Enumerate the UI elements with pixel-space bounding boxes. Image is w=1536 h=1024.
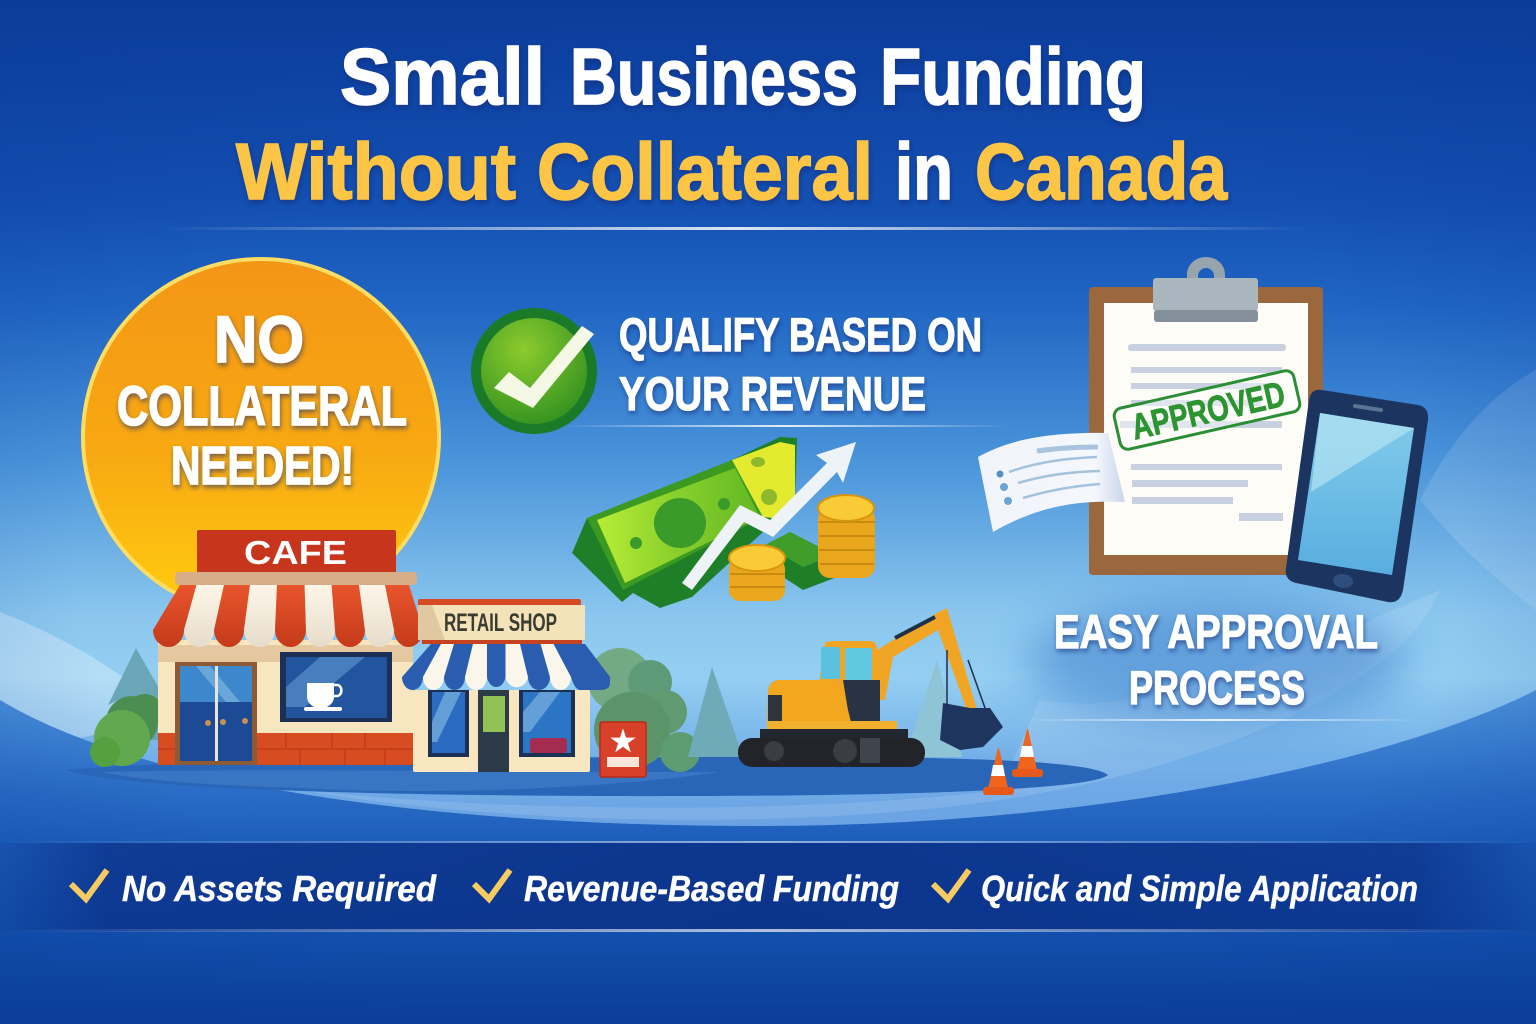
check badge	[471, 308, 597, 434]
badge: no collateral needed: NO	[214, 302, 304, 376]
title line 1: Small	[340, 32, 545, 121]
cafe building	[153, 530, 423, 765]
qualify text: QUALIFY BASED ON	[619, 308, 982, 361]
badge: no collateral needed	[83, 259, 439, 615]
retail sign: RETAIL SHOP	[444, 609, 557, 637]
phone	[1286, 390, 1428, 602]
retail windows and door	[428, 690, 575, 772]
easy approval text	[1054, 605, 1378, 714]
retail awning	[402, 644, 610, 690]
cafe sign	[197, 530, 396, 573]
bottom band	[0, 841, 1536, 932]
ground shadow	[65, 757, 1108, 796]
title line 1: Business	[570, 32, 858, 121]
easy approval text: EASY APPROVAL	[1054, 605, 1378, 658]
money and coins chart	[572, 437, 875, 608]
retail shop	[402, 599, 610, 772]
badge: no collateral needed: NEEDED!	[171, 436, 354, 496]
clipboard	[1089, 257, 1323, 575]
easy approval text: PROCESS	[1129, 661, 1305, 714]
clip	[1153, 257, 1258, 322]
paper note	[978, 433, 1125, 532]
benefit 3: Quick and Simple Application	[981, 868, 1418, 909]
awning beam	[175, 572, 417, 585]
excavator	[738, 608, 1003, 767]
tracks	[760, 729, 908, 738]
document lines	[1120, 344, 1286, 521]
boom and arm	[877, 608, 977, 713]
retail sign	[418, 599, 585, 644]
qualify text	[619, 308, 982, 420]
cafe awning	[153, 585, 423, 647]
small note stack	[765, 532, 837, 590]
cafe door	[175, 662, 257, 765]
traffic cones	[983, 729, 1043, 795]
approved stamp: APPROVED	[1127, 373, 1289, 448]
coins front	[729, 545, 785, 601]
coins right	[818, 495, 875, 578]
badge: no collateral needed: COLLATERAL	[117, 374, 407, 437]
title line 2: Canada	[975, 127, 1227, 216]
sandwich sign: ★	[610, 726, 636, 758]
cafe wall	[158, 640, 413, 765]
bucket	[940, 703, 1003, 750]
title line 1: Funding	[880, 32, 1146, 121]
cafe window with cup	[280, 652, 392, 722]
title line 2: in	[895, 127, 953, 216]
benefit 2: Revenue-Based Funding	[524, 868, 899, 909]
title line 2: Without	[236, 127, 516, 216]
qualify text: YOUR REVENUE	[619, 367, 926, 420]
benefit 1: No Assets Required	[122, 868, 437, 909]
trees left and right of shops	[90, 648, 962, 772]
banknote stack	[572, 437, 797, 608]
title line 2	[236, 127, 1227, 216]
sandwich sign	[600, 722, 646, 777]
body	[767, 680, 852, 726]
cafe sign: CAFE	[244, 534, 347, 571]
title	[236, 32, 1227, 216]
title line 2: Collateral	[537, 127, 873, 216]
growth arrow	[682, 442, 856, 590]
retail wall	[413, 690, 590, 772]
cab	[817, 641, 880, 723]
title line 1	[340, 32, 1146, 121]
